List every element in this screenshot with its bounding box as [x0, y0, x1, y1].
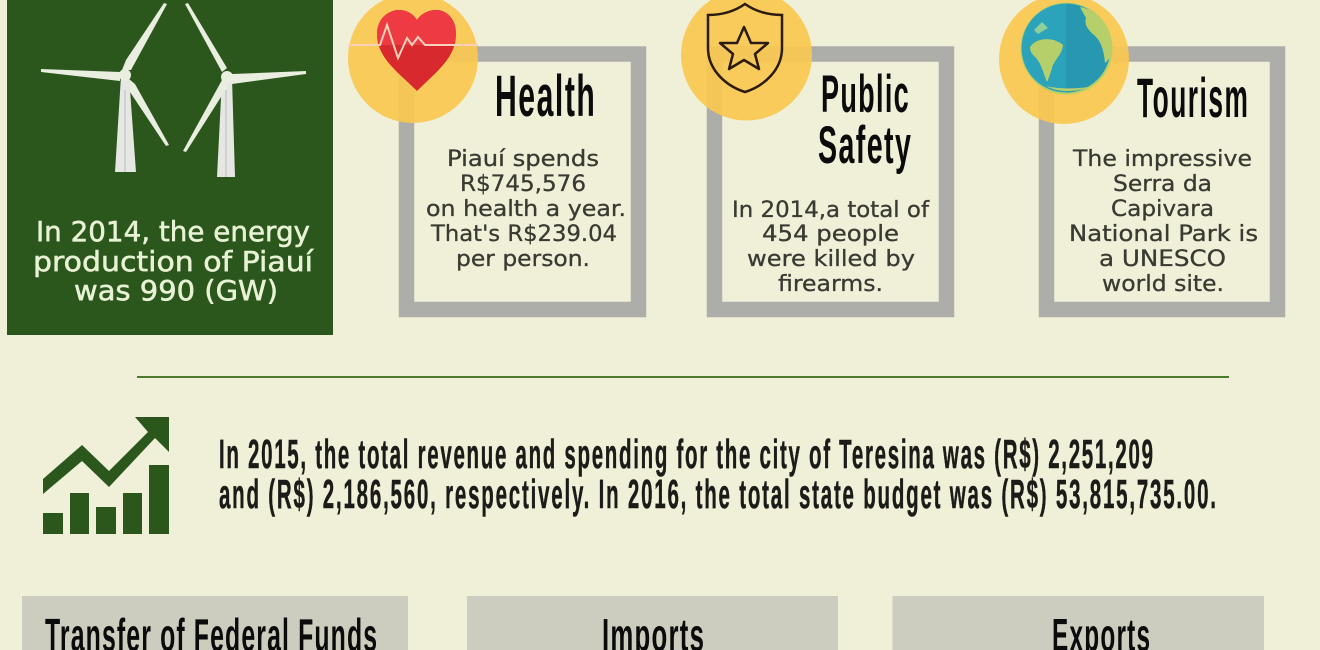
- panel: exports: [892, 596, 1264, 650]
- health text: on health a year.: [426, 197, 626, 222]
- public safety text: [732, 198, 930, 297]
- icon: shield on yellow circle: [681, 0, 812, 120]
- energy text: [33, 215, 314, 307]
- tourism text: Capivara: [1111, 197, 1214, 222]
- icon: globe on yellow circle: [999, 0, 1129, 124]
- health text: [426, 147, 626, 272]
- icon: wind turbines: [41, 3, 306, 177]
- panel: tourism: [999, 0, 1278, 310]
- panel: transfer of federal funds: [22, 596, 408, 650]
- tourism text: Serra da: [1113, 172, 1212, 197]
- divider line: [137, 376, 1229, 378]
- tourism text: The impressive: [1072, 147, 1252, 172]
- public safety text: were killed by: [747, 247, 915, 272]
- health heading: Health: [495, 63, 595, 129]
- energy text: production of Piauí: [33, 245, 314, 278]
- tourism text: National Park is: [1069, 222, 1258, 247]
- revenue and budget text: and (R$) 2,186,560, respectively. In 2016, the total state budget was (R$) 53,815,735.00.: [219, 471, 1216, 517]
- health text: Piauí spends: [447, 147, 599, 172]
- tourism text: [1069, 147, 1258, 297]
- public safety heading: Safety: [818, 116, 911, 175]
- public safety text: firearms.: [778, 272, 883, 297]
- public safety text: In 2014,a total of: [732, 198, 930, 223]
- health text: R$745,576: [460, 172, 586, 197]
- health text: per person.: [456, 247, 590, 272]
- panel: health: [348, 0, 638, 310]
- revenue and budget text: [219, 431, 1216, 517]
- tourism heading: Tourism: [1137, 67, 1248, 130]
- panel: public safety: [681, 0, 946, 310]
- panel: imports: [467, 596, 838, 650]
- tourism text: world site.: [1102, 272, 1224, 297]
- tourism text: a UNESCO: [1099, 247, 1226, 272]
- health text: That's R$239.04: [430, 222, 617, 247]
- public safety text: 454 people: [762, 222, 899, 247]
- public safety heading: Public: [821, 64, 909, 123]
- energy text: was 990 (GW): [74, 274, 278, 307]
- icon: heart on yellow circle: [348, 0, 478, 123]
- public safety heading: [818, 64, 911, 175]
- energy text: In 2014, the energy: [36, 215, 310, 248]
- revenue and budget text: In 2015, the total revenue and spending for the city of Teresina was (R$) 2,251,209: [219, 431, 1153, 477]
- panel: energy production: [7, 0, 333, 335]
- icon: growth chart: [43, 417, 169, 534]
